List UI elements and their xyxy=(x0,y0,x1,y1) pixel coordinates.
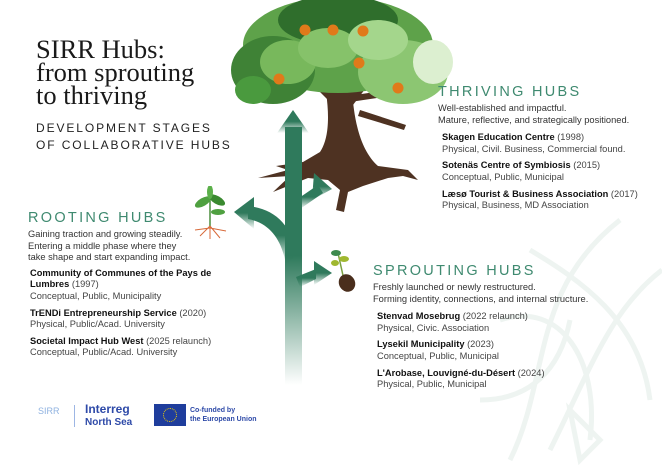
panel: rooting hubs: Community of Communes of the Pays de Lumbres (1997) xyxy=(30,268,211,289)
subtitle: OF COLLABORATIVE HUBS xyxy=(36,138,232,152)
logo: Interreg xyxy=(85,402,132,428)
panel: sprouting hubs: Physical, Civic. Association xyxy=(377,323,489,333)
panel: thriving hubs: THRIVING HUBS xyxy=(438,84,582,100)
subtitle xyxy=(36,121,232,152)
panel: rooting hubs: ROOTING HUBS xyxy=(28,210,168,226)
panel: sprouting hubs: SPROUTING HUBS xyxy=(373,263,536,279)
logo: SIRR: SIRR xyxy=(38,406,60,416)
panel: rooting hubs: TrENDi Entrepreneurship Service (2020) xyxy=(30,308,206,318)
panel: sprouting hubs: L'Arobase, Louvigné-du-Désert (2024) xyxy=(377,368,545,378)
panel: thriving hubs: Mature, reflective, and strategically positioned. xyxy=(438,115,629,125)
icon: seedling with roots xyxy=(194,186,226,239)
panel: thriving hubs: Læsø Tourist & Business Association (2017) xyxy=(442,189,638,199)
panel: sprouting hubs xyxy=(373,263,588,389)
panel: rooting hubs: Conceptual, Public, Municipality xyxy=(30,291,161,301)
logo: co-funded text xyxy=(190,406,256,423)
logos footer xyxy=(38,402,256,428)
panel: thriving hubs: Conceptual, Public, Municipal xyxy=(442,172,564,182)
panel: sprouting hubs: Lysekil Municipality (2023) xyxy=(377,339,494,349)
arrows: growth stem xyxy=(234,110,332,380)
panel: thriving hubs: Physical, Civil. Business, Commercial found. xyxy=(442,144,625,154)
panel: thriving hubs xyxy=(438,84,638,210)
panel: sprouting hubs: Stenvad Mosebrug (2022 relaunch) xyxy=(377,311,528,321)
logo: Interreg: Interreg xyxy=(85,402,130,416)
title: to thriving xyxy=(36,80,147,110)
title xyxy=(36,34,194,110)
panel: sprouting hubs: Forming identity, connections, and internal structure. xyxy=(373,294,588,304)
panel: rooting hubs: take shape and start expanding impact. xyxy=(28,252,190,262)
panel: sprouting hubs: Conceptual, Public, Municipal xyxy=(377,351,499,361)
panel: sprouting hubs: Freshly launched or newly restructured. xyxy=(373,282,536,292)
logo: co-funded text: Co-funded by xyxy=(190,407,235,414)
icon: sprouting seed xyxy=(331,250,356,292)
logo: co-funded text: the European Union xyxy=(190,416,256,423)
panel: thriving hubs: Skagen Education Centre (1998) xyxy=(442,132,584,142)
panel: rooting hubs: Conceptual, Public/Acad. University xyxy=(30,347,177,357)
logo: Interreg: North Sea xyxy=(85,417,132,428)
panel: rooting hubs: Gaining traction and growing steadily. xyxy=(28,229,182,239)
panel: thriving hubs: Well-established and impactful. xyxy=(438,103,566,113)
panel: thriving hubs: Physical, Business, MD Association xyxy=(442,200,589,210)
subtitle: DEVELOPMENT STAGES xyxy=(36,121,212,135)
title: from sprouting xyxy=(36,57,194,87)
background decoration xyxy=(480,218,662,465)
panel: rooting hubs: Physical, Public/Acad. University xyxy=(30,319,165,329)
panel: rooting hubs: Entering a middle phase where they xyxy=(28,241,176,251)
logo: EU flag xyxy=(154,404,186,426)
panel: rooting hubs: Societal Impact Hub West (2025 relaunch) xyxy=(30,336,211,346)
panel: thriving hubs: Sotenäs Centre of Symbiosis (2015) xyxy=(442,160,600,170)
panel: sprouting hubs: Physical, Public, Municipal xyxy=(377,379,487,389)
tree illustration xyxy=(231,0,453,212)
title: SIRR Hubs: xyxy=(36,34,165,64)
panel: rooting hubs xyxy=(28,210,211,357)
